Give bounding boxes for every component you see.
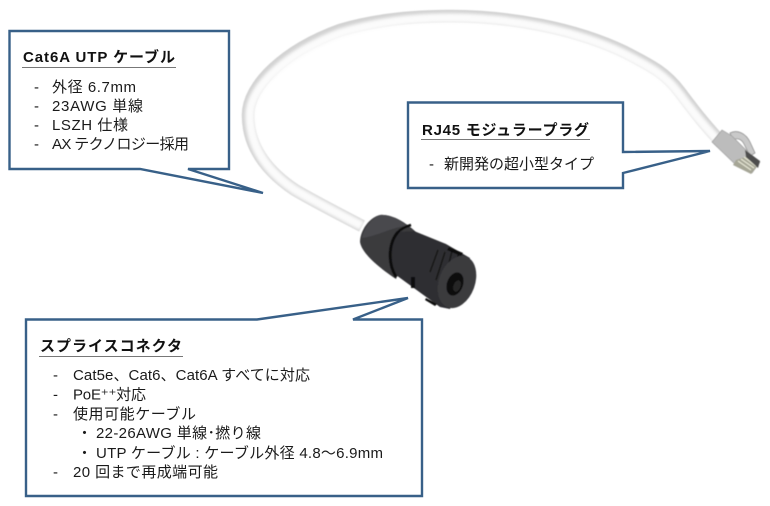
text block: plug feature: 新開発の超小型タイプ bbox=[444, 156, 594, 173]
text block: cable specs bbox=[34, 79, 189, 153]
text block: connector specs: 20 回まで再成端可能 bbox=[73, 464, 218, 481]
text block: plug feature: - bbox=[429, 156, 434, 173]
text block: connector specs: - bbox=[53, 464, 58, 481]
text block: connector specs: - bbox=[53, 386, 58, 404]
callout: RJ45 modular plug bbox=[408, 102, 710, 188]
text block: connector specs: - bbox=[53, 406, 58, 423]
heading: splice connector: スプライスコネクタ bbox=[40, 338, 182, 355]
text block: cable specs: - bbox=[34, 136, 39, 153]
text block: cable specs: 23AWG 単線 bbox=[52, 98, 143, 115]
heading: Cat6A UTP cable: Cat6A UTP ケーブル bbox=[23, 48, 175, 66]
heading: RJ45 modular plug: RJ45 モジュラープラグ bbox=[422, 121, 589, 139]
icon: RJ45 plug bbox=[712, 130, 760, 174]
text block: cable specs: - bbox=[34, 79, 39, 96]
text block: connector specs: 22-26AWG 単線･撚り線 bbox=[96, 425, 261, 442]
text block: cable specs: - bbox=[34, 98, 39, 115]
text block: connector specs: ・ bbox=[77, 445, 92, 462]
text block: connector specs: - bbox=[53, 367, 58, 384]
text block: connector specs: UTP ケーブル : ケーブル外径 4.8～6.9mm bbox=[96, 444, 383, 462]
text block: connector specs: ・ bbox=[77, 425, 92, 442]
text block: cable specs: 外径 6.7mm bbox=[52, 79, 136, 96]
callout: splice connector bbox=[26, 298, 422, 496]
text block: connector specs: 使用可能ケーブル bbox=[73, 405, 196, 423]
text block: connector specs: PoE⁺⁺対応 bbox=[73, 386, 146, 404]
text block: cable specs: LSZH 仕様 bbox=[52, 117, 128, 134]
text block: connector specs: Cat5e、Cat6、Cat6A すべてに対応 bbox=[73, 367, 310, 384]
text block: connector specs bbox=[53, 367, 383, 481]
text block: cable specs: AX テクノロジー採用 bbox=[52, 136, 189, 153]
icon: splice connector bbox=[360, 215, 483, 314]
callout: Cat6A UTP cable bbox=[10, 31, 263, 193]
text block: cable specs: - bbox=[34, 117, 39, 134]
cable bbox=[248, 16, 722, 226]
